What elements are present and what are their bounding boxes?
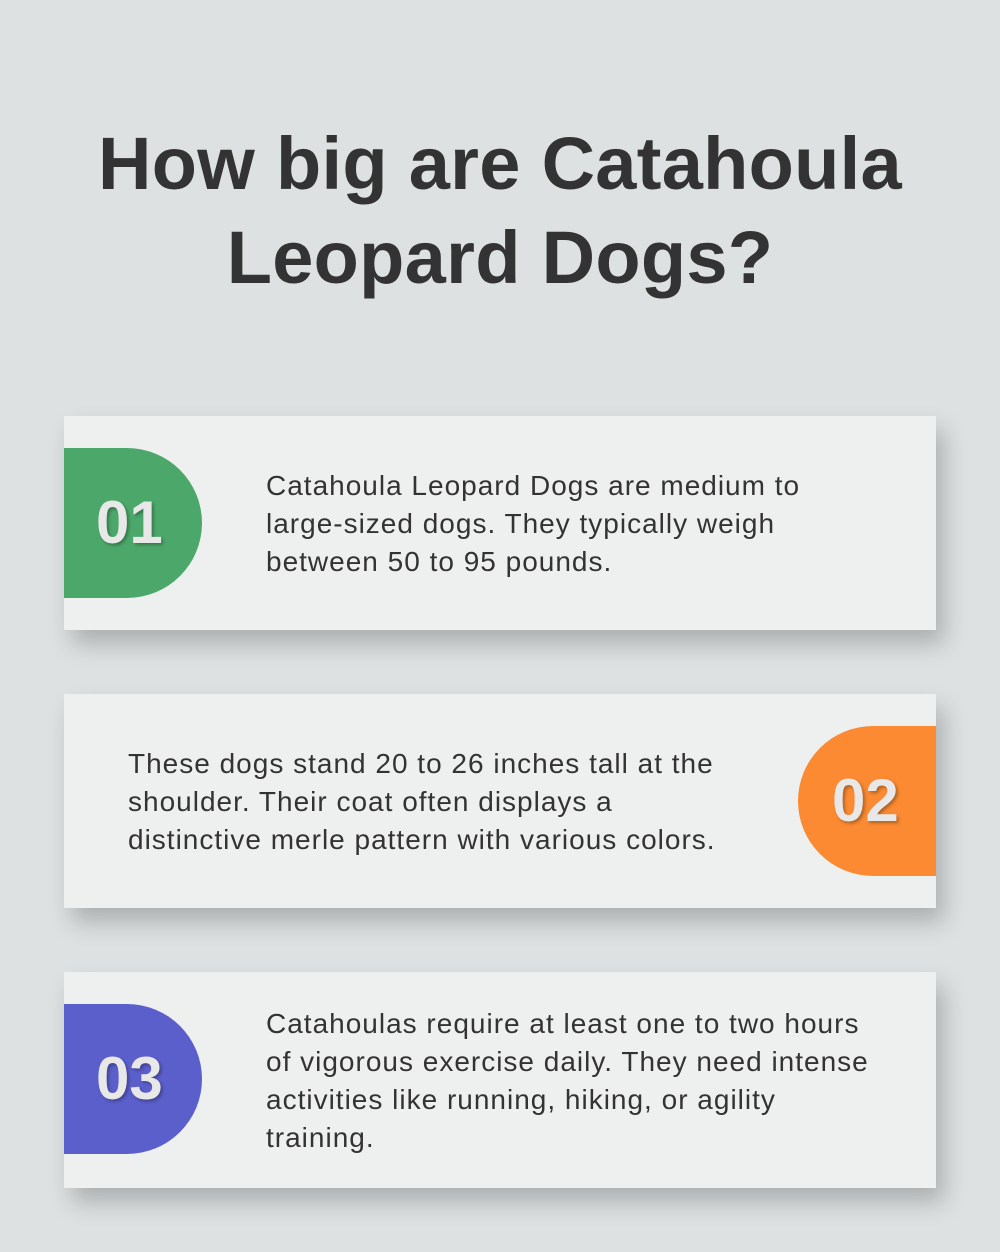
badge 02: 02 <box>832 767 899 834</box>
text 3: of vigorous exercise daily. They need intense <box>266 1046 869 1077</box>
badge 01 <box>64 448 202 598</box>
panel: card 3 <box>64 972 936 1188</box>
text 1: between 50 to 95 pounds. <box>266 546 612 577</box>
title: How big are Catahoula <box>98 122 902 205</box>
text 1: Catahoula Leopard Dogs are medium to <box>266 470 800 501</box>
badge 03: 03 <box>96 1045 163 1112</box>
text 2 <box>128 748 716 855</box>
text 2: distinctive merle pattern with various colors. <box>128 824 716 855</box>
text 3: training. <box>266 1122 375 1153</box>
text 1 <box>266 470 800 577</box>
panel: card 1 <box>64 416 936 630</box>
panel: card 2 <box>64 694 936 908</box>
badge 02 <box>798 726 936 876</box>
title <box>98 122 902 299</box>
title: Leopard Dogs? <box>227 216 773 299</box>
text 1: large-sized dogs. They typically weigh <box>266 508 775 539</box>
text 2: These dogs stand 20 to 26 inches tall at the <box>128 748 714 779</box>
text 3 <box>266 1008 869 1153</box>
text 2: shoulder. Their coat often displays a <box>128 786 613 817</box>
badge 01: 01 <box>96 489 163 556</box>
text 3: Catahoulas require at least one to two hours <box>266 1008 859 1039</box>
badge 03 <box>64 1004 202 1154</box>
text 3: activities like running, hiking, or agility <box>266 1084 776 1115</box>
